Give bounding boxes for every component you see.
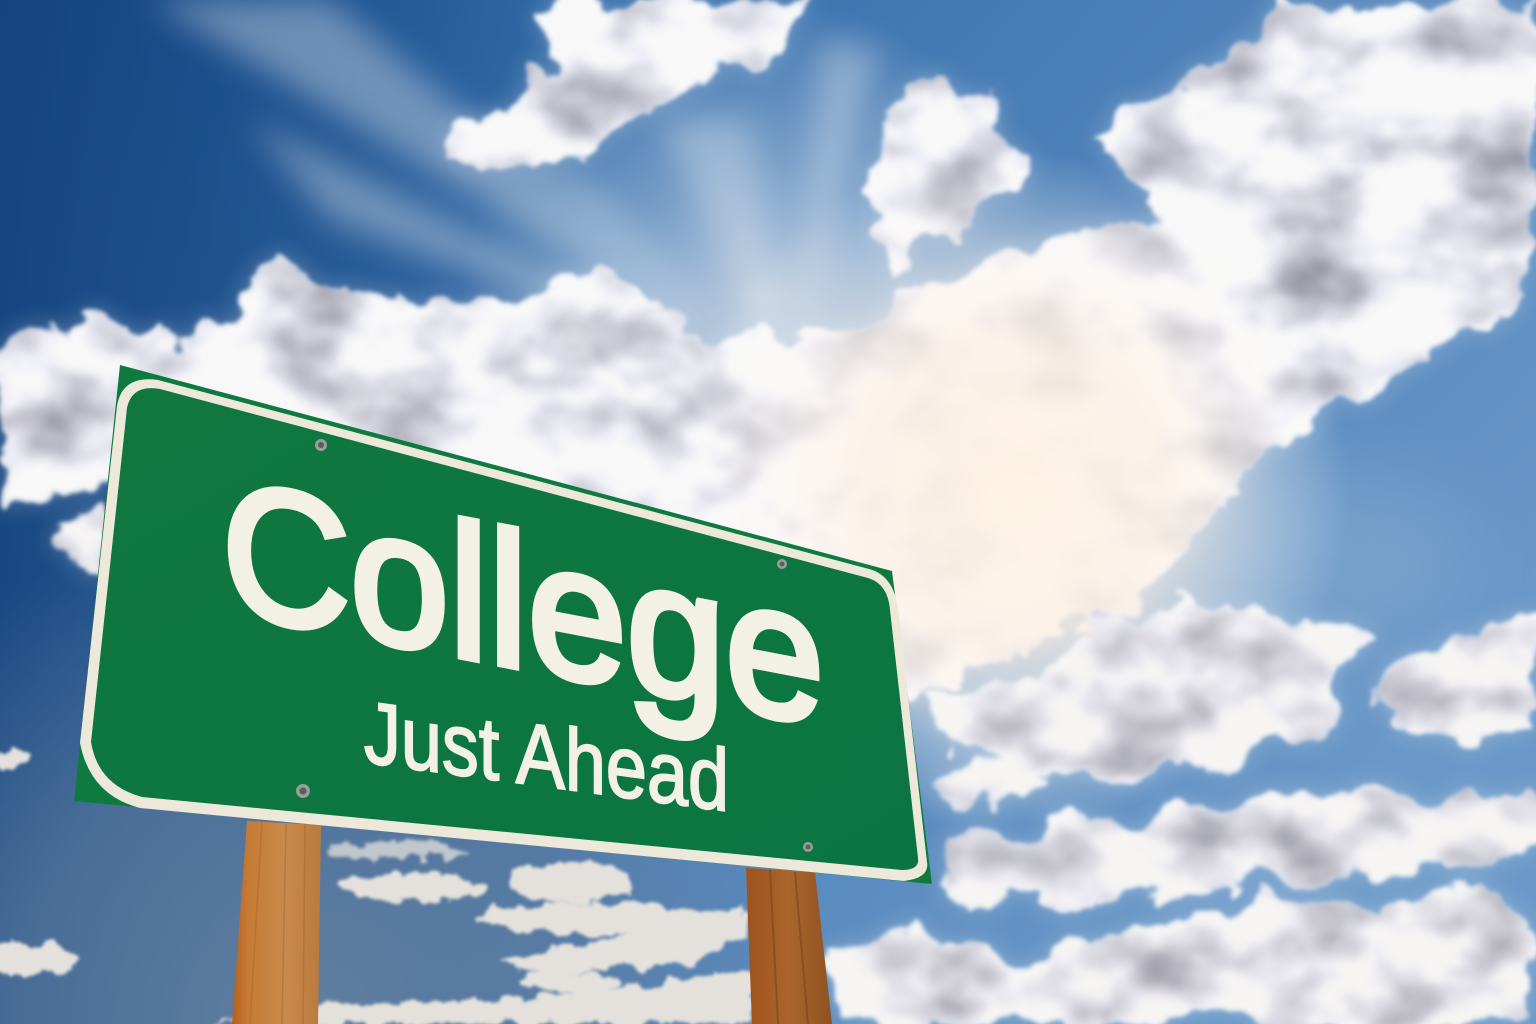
bolt: bottom right	[803, 842, 813, 852]
sun glow	[670, 150, 1350, 830]
bolt: bottom left	[296, 784, 310, 798]
clouds: large upper masses	[0, 0, 1536, 700]
road sign	[74, 365, 932, 884]
sign text: College: College	[222, 439, 824, 766]
bolt: top left	[315, 439, 327, 451]
clouds: small low clouds	[0, 750, 750, 1024]
bolt: top right	[777, 559, 787, 569]
sign text: Just Ahead: Just Ahead	[364, 682, 729, 830]
sign border	[80, 379, 927, 881]
sign face	[91, 388, 918, 870]
sign backing	[74, 365, 932, 884]
wooden post: left	[232, 821, 321, 1024]
clouds: lower right and left	[46, 500, 1536, 1024]
wooden post: right	[746, 868, 832, 1024]
sun rays	[150, 0, 880, 390]
